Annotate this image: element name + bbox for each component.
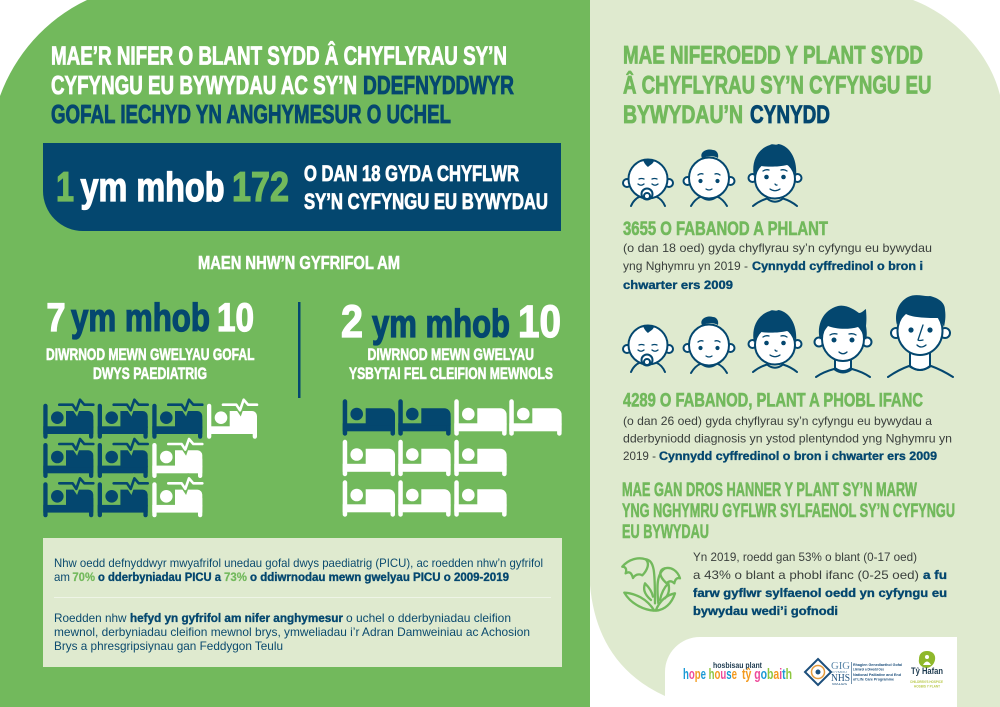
text block: 2019 deaths: bywydau wedi’i gofnodi [693,604,838,618]
text: admissions paragraph [54,611,530,653]
text: admissions paragraph: Brys a phresgripsiynau gan Feddygon Teulu [54,639,283,653]
text: admissions paragraph: o uchel o dderbyniadau cleifion [346,611,511,625]
text: PICU paragraph: 70% [72,570,95,584]
text: admissions paragraph: Roedden nhw [54,611,127,625]
logo: Ty Hafan: Tŷ Hafan [911,666,943,677]
text block: 4289 infants, children and young people: dderbyniodd diagnosis yn ystod plentyndod yng Nghymru yn [623,432,952,446]
statistic: 7 in 10: ym mhob [71,297,210,340]
text block: 3655 infants and children [623,218,932,292]
statistic: 7 in 10: DWYS PAEDIATRIG [93,365,207,383]
logo: Hope House Ty Gobaith: hosbisau plant [713,660,762,670]
text block: 2019 deaths: Yn 2019, roedd gan 53% o blant (0-17 oed) [693,550,917,564]
text block: 3655 infants and children: yng Nghymru yn 2019 - [623,259,748,273]
callout: 1 in 172 banner: O DAN 18 GYDA CHYFLWR [304,161,519,186]
text: PICU paragraph: am [54,570,70,584]
heading: right title: CYNYDD [750,101,830,129]
heading: main left title: GOFAL IECHYD YN ANGHYMESUR O UCHEL [51,101,451,129]
text block: 2019 deaths: farw gyflwr sylfaenol oedd yn cyfyngu eu [693,586,947,600]
callout: 1 in 172 banner: ym mhob [80,164,224,210]
logo: GIG Cymru NHS Wales: NHS [831,673,850,684]
logo: GIG Cymru NHS Wales: National Palliative and End [853,673,902,677]
logo: GIG Cymru NHS Wales: GIG [831,661,850,672]
icon: snowdrop flowers [622,558,680,611]
logo: GIG Cymru NHS Wales: WALES [832,682,847,686]
logo: Ty Hafan [910,651,944,688]
heading: main left title: CYFYNGU EU BYWYDAU AC SY’N [51,72,357,100]
text block: 4289 infants, children and young people: 2019 - [623,449,656,463]
logo: Ty Hafan: HOSBIS Y PLANT [914,684,941,688]
callout: 1 in 172 banner [43,143,561,231]
icon grid: intensive care beds, 7 of 10 [43,400,257,517]
panel: left green background [0,0,590,707]
heading: right title: BYWYDAU’N [623,101,743,129]
callout: 1 in 172 banner: 1 [56,163,74,210]
icon grid: hospital beds, 2 of 10 [343,399,562,517]
heading: right title [623,42,932,129]
statistic: 7 in 10: DIWRNOD MEWN GWELYAU GOFAL [46,346,254,364]
logo: Ty Hafan: CHILDREN’S HOSPICE [910,680,944,684]
text: admissions paragraph: mewnol, derbyniadau cleifion mewnol brys, ymweliadau i’r Adran Damweiniau ac Achosion [54,625,530,639]
text block: 4289 infants, children and young people [623,390,952,463]
text: PICU paragraph: 73% [224,570,247,584]
statistic: 2 in 10: 2 [341,296,363,347]
logo: GIG Cymru NHS Wales [805,659,902,686]
statistic: 7 in 10: 10 [217,296,254,340]
logo: Hope House Ty Gobaith [683,660,792,683]
callout: 1 in 172 banner: SY’N CYFYNGU EU BYWYDAU [304,189,548,214]
statistic: 2 in 10: ym mhob [372,303,510,346]
text block: 4289 infants, children and young people: Cynnydd cyffredinol o bron i chwarter ers 2009 [659,449,937,463]
text: PICU paragraph: o ddiwrnodau mewn gwelyau PICU o 2009-2019 [250,570,509,584]
text: PICU paragraph [54,556,543,584]
heading: over half of children who die: EU BYWYDAU [622,521,709,543]
callout: 1 in 172 banner: 172 [232,163,289,210]
logo: GIG Cymru NHS Wales: CYMRU [832,670,847,674]
text block: 4289 infants, children and young people: (o dan 26 oed) gyda chyflyrau sy’n cyfyngu eu bywydau a [623,414,932,428]
panel: right pale background [590,0,1000,707]
icons: three children faces [623,144,802,206]
text: PICU paragraph: Nhw oedd defnyddwyr mwyafrifol unedau gofal dwys paediatrig (PICU), ac roedden nhw’n gyfrifol [54,556,543,570]
text block: 3655 infants and children: (o dan 18 oed) gyda chyflyrau sy’n cyfyngu eu bywydau [623,241,932,255]
statistic: 7 in 10: 7 [46,296,66,340]
statistic: 2 in 10: DIWRNOD MEWN GWELYAU [368,346,534,364]
logo: Hope House Ty Gobaith: tŷ gobaith [742,666,792,683]
logo: Hope House Ty Gobaith: hope house [683,666,737,683]
text: admissions paragraph: hefyd yn gyfrifol am nifer anghymesur [130,611,343,625]
text block: 2019 deaths: a 43% o blant a phobl ifanc (0-25 oed) [693,568,919,582]
text block: 3655 infants and children: 3655 O FABANOD A PHLANT [623,218,828,240]
heading: main left title [51,40,514,129]
statistic: 2 in 10: YSBYTAI FEL CLEIFION MEWNOLS [349,365,553,383]
divider between statistics [298,302,300,398]
logo: GIG Cymru NHS Wales: Lliniarol a Diwedd Oes [853,668,884,672]
panel: logo strip [665,637,957,707]
logo: GIG Cymru NHS Wales: of Life Care Programme [853,678,894,682]
text block: 2019 deaths [693,550,947,618]
subheading: responsible for: MAEN NHW’N GYFRIFOL AM [198,252,400,273]
statistic: 2 in 10 [341,296,561,383]
heading: main left title: DDEFNYDDWYR [363,72,514,100]
text block: 3655 infants and children: chwarter ers 2009 [623,278,733,292]
heading: main left title: MAE’R NIFER O BLANT SYDD Â CHYFLYRAU SY’N [51,40,507,70]
icons: five faces from baby to young adult [623,295,953,377]
panel: PICU text box [43,538,562,667]
statistic: 2 in 10: 10 [518,296,561,347]
text block: 2019 deaths: a fu [923,568,947,582]
text block: 3655 infants and children: Cynnydd cyffredinol o bron i [752,259,923,273]
logo: GIG Cymru NHS Wales: Rhaglen Genedlaethol Gofal [853,663,902,667]
heading: over half of children who die [622,479,955,543]
statistic: 7 in 10 [46,296,254,383]
text: PICU paragraph: o dderbyniadau PICU a [98,570,221,584]
